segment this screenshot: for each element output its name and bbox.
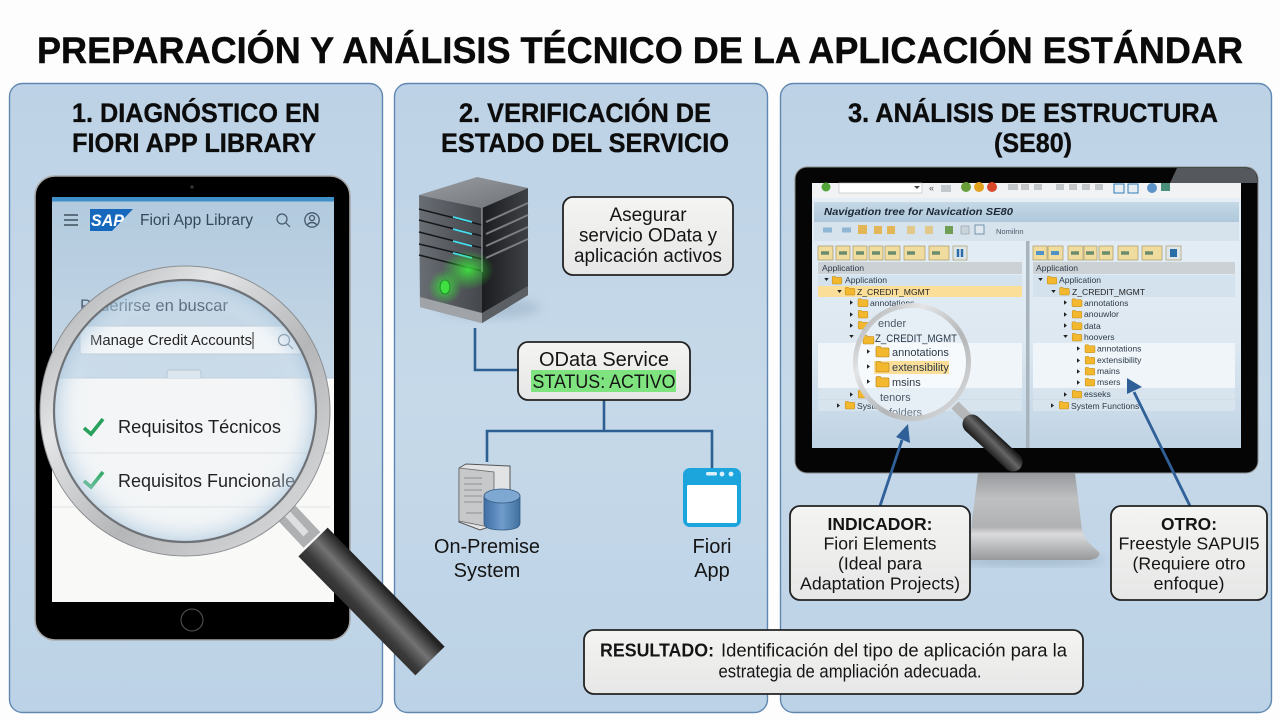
- arrow: otro: [1127, 378, 1190, 506]
- callout: resultado: Identificación del tipo de aplicación para la: [721, 640, 1068, 660]
- se80 screen: [812, 182, 1241, 448]
- icon: fiori app window: [683, 468, 741, 527]
- callout: otro: (Requiere otro: [1132, 554, 1246, 574]
- lens contents: folders: [889, 407, 923, 419]
- tablet: [35, 176, 350, 640]
- search field: [80, 326, 305, 354]
- right pane: annotations: [1097, 344, 1141, 354]
- user icon: [305, 213, 319, 227]
- callout: indicador: (Ideal para: [838, 554, 922, 574]
- search icon: [277, 214, 290, 227]
- label: fiori app: Fiori: [693, 536, 731, 558]
- right pane: System Functions: [1071, 401, 1139, 411]
- right pane: msers: [1097, 377, 1120, 387]
- SAP logo: SAP: [91, 212, 125, 230]
- callout: indicador: INDICADOR:: [828, 514, 932, 534]
- magnifier: tablet: [40, 266, 430, 661]
- lens tint area: [54, 280, 316, 542]
- lens contents: ender: [878, 318, 906, 330]
- magnifier handle: [955, 405, 1013, 462]
- heading: verificacion: ESTADO DEL SERVICIO: [441, 128, 729, 158]
- lens contents: extensibility: [892, 362, 949, 374]
- right pane: Application: [1036, 263, 1078, 273]
- callout: resultado: [584, 630, 1083, 694]
- lens contents: [862, 319, 962, 416]
- panel background: [394, 84, 768, 712]
- heading: diagnostico: 1. DIAGNÓSTICO EN: [72, 97, 320, 128]
- panel: 1 diagnostico: [10, 84, 430, 712]
- home button: [181, 609, 203, 631]
- callout: asegurar: servicio OData y: [579, 226, 717, 246]
- left pane: [818, 246, 1022, 411]
- system toolbar: «: [929, 183, 934, 193]
- right pane: Application: [1059, 275, 1101, 285]
- right pane: esseks: [1084, 389, 1111, 399]
- right pane: annotations: [1084, 298, 1128, 308]
- callout: resultado: RESULTADO:: [600, 640, 714, 660]
- label: fiori app: [693, 536, 731, 582]
- heading: diagnostico: [72, 97, 320, 158]
- callout: otro: enfoque): [1154, 574, 1224, 594]
- left pane: System Functions: [857, 401, 925, 411]
- callout: asegurar: aplicación activos: [574, 246, 722, 267]
- application toolbar: [814, 222, 1239, 241]
- callout: indicador: Adaptation Projects): [800, 574, 960, 594]
- check: requisitos tecnicos: [84, 419, 103, 434]
- left pane: Z_CREDIT_MGMT: [857, 287, 931, 297]
- lens glass: [54, 280, 316, 542]
- hamburger menu icon: [64, 215, 78, 225]
- label: on-premise system: [434, 536, 540, 582]
- magnifier handle: [280, 506, 430, 661]
- right pane: hoovers: [1084, 332, 1115, 342]
- callout: asegurar: [563, 197, 733, 275]
- right pane: data: [1084, 321, 1101, 331]
- monitor stand: [940, 473, 1105, 565]
- right pane: mains: [1097, 366, 1120, 376]
- left pane: Application: [822, 263, 864, 273]
- text: requisitos funcionales: Requisitos Funcionales: [118, 471, 304, 491]
- icon: on-premise system: [459, 464, 520, 530]
- app name: Fiori App Library: [140, 212, 253, 229]
- lens ring: [856, 306, 968, 418]
- window title bar: [814, 202, 1239, 222]
- lens ring: [47, 273, 323, 549]
- label: on-premise system: On-Premise: [434, 536, 540, 558]
- callout: resultado: estrategia de ampliación adecuada.: [718, 662, 982, 682]
- right pane: extensibility: [1097, 355, 1142, 365]
- tablet screen: [52, 197, 334, 602]
- text: requisitos tecnicos: Requisitos Técnicos: [118, 417, 281, 437]
- heading: analisis: [848, 97, 1218, 158]
- lens contents: msins: [892, 377, 921, 389]
- callout: otro: [1111, 506, 1267, 600]
- callout: otro: Freestyle SAPUI5: [1118, 534, 1260, 554]
- callout: otro: OTRO:: [1161, 514, 1217, 534]
- heading: verificacion: 2. VERIFICACIÓN DE: [459, 97, 711, 128]
- panel background: [780, 84, 1272, 712]
- box: odata service status: OData Service: [539, 349, 669, 371]
- label: on-premise system: System: [454, 560, 520, 582]
- left pane: Application: [845, 275, 887, 285]
- monitor: [795, 167, 1258, 473]
- pane divider: [1026, 241, 1030, 448]
- box: odata service status: [518, 342, 690, 400]
- tab: [167, 370, 201, 378]
- lens contents: tenors: [880, 392, 911, 404]
- right pane: [1033, 246, 1235, 411]
- box: odata service status: STATUS: ACTIVO: [532, 372, 676, 393]
- icon: server rack: [419, 177, 540, 323]
- search field: Manage Credit Accounts: [90, 333, 252, 349]
- panel: 2 verificacion: [394, 84, 768, 712]
- right pane: Z_CREDIT_MGMT: [1072, 287, 1146, 297]
- title: PREPARACIÓN Y ANÁLISIS TÉCNICO DE LA APLICACIÓN ESTÁNDAR: [37, 29, 1243, 71]
- lens contents: annotations: [892, 347, 949, 359]
- label: fiori app: App: [694, 560, 730, 582]
- connector: server to odata: [475, 328, 518, 370]
- callout: indicador: [790, 506, 970, 600]
- magnifier: se80: [856, 306, 1013, 462]
- left pane: annotations: [870, 298, 914, 308]
- check: requisitos funcionales: [84, 472, 103, 487]
- heading: analisis: (SE80): [994, 128, 1072, 158]
- panel: 3 analisis: [780, 84, 1272, 712]
- panel background: [10, 84, 382, 712]
- application toolbar: Nomilnn: [996, 227, 1024, 236]
- window title bar: Navigation tree for Navication SE80: [824, 207, 1013, 218]
- lens contents: Z_CREDIT_MGMT: [875, 333, 957, 345]
- system toolbar: [812, 182, 1241, 198]
- heading: analisis: 3. ANÁLISIS DE ESTRUCTURA: [848, 97, 1218, 128]
- search label: Poderirse en buscar: [80, 297, 228, 315]
- callout: asegurar: Asegurar: [609, 205, 687, 226]
- arrow: indicador: [880, 424, 910, 506]
- connector: odata to systems: [487, 400, 712, 468]
- right pane: anouwlor: [1084, 309, 1119, 319]
- SAP logo: [90, 209, 133, 231]
- callout: indicador: Fiori Elements: [824, 534, 937, 554]
- heading: diagnostico: FIORI APP LIBRARY: [72, 128, 316, 158]
- heading: verificacion: [441, 97, 729, 158]
